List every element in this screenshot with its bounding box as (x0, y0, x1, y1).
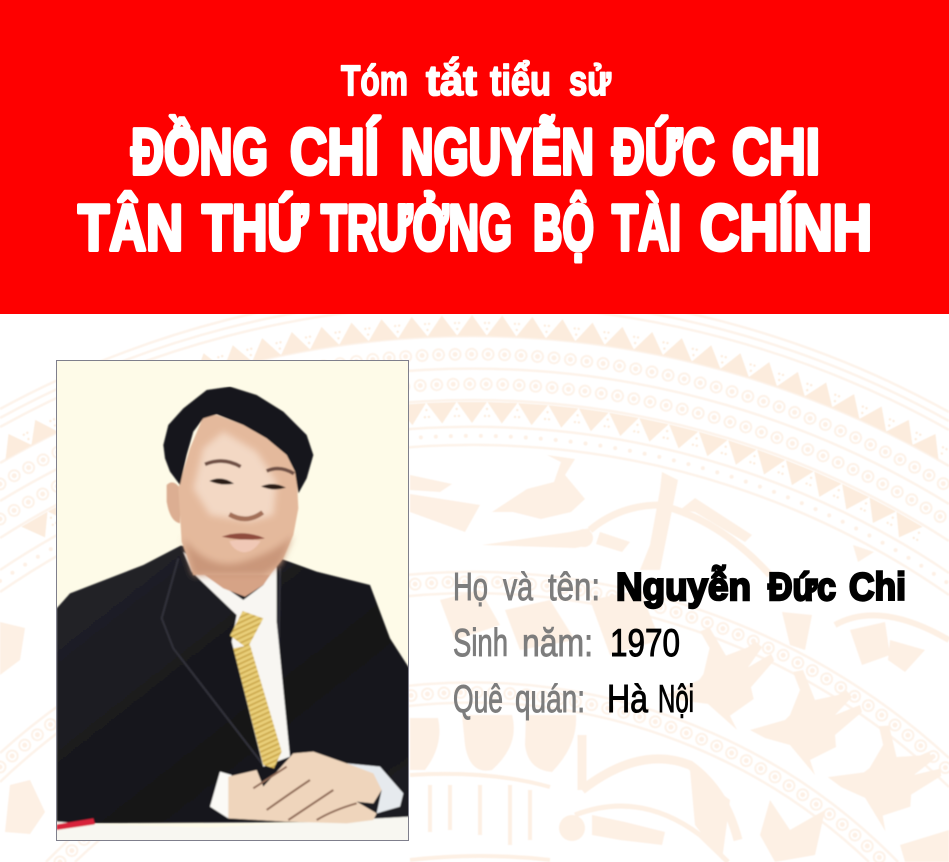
label: full name: tên: (548, 566, 600, 609)
tie (230, 611, 282, 768)
deer (750, 670, 862, 775)
title: kicker: tiểu (490, 57, 551, 105)
deer (821, 718, 947, 838)
bird (492, 455, 585, 519)
title: position line: THỨ (202, 191, 308, 264)
label: hometown: Quê (453, 678, 503, 721)
house motif (559, 735, 738, 862)
chin and neck (205, 574, 271, 598)
value: hometown: Nội (658, 678, 694, 721)
hands (210, 752, 403, 823)
outer triangle band (0, 315, 949, 461)
deer (657, 619, 784, 739)
label: full name: và (503, 566, 533, 609)
label: hometown: quán: (515, 678, 585, 721)
crane (482, 472, 770, 575)
red banner (0, 0, 949, 314)
eyes (209, 479, 286, 489)
table (57, 817, 410, 842)
hair (163, 387, 313, 493)
label: birth year: Sinh (453, 622, 508, 665)
biography details (453, 565, 906, 721)
comb fragment under text (590, 590, 660, 655)
title: name line: NGUYỄN (401, 115, 594, 188)
value: full name: Chi (849, 566, 906, 609)
title: position line: TÀI (612, 191, 681, 264)
lower figures (410, 774, 550, 860)
label: full name: Họ (453, 566, 488, 609)
title: name line: CHI (732, 115, 820, 188)
photo backdrop (56, 360, 408, 840)
shirt (183, 552, 290, 767)
rings of small circles (0, 354, 949, 862)
bird frieze, top ring (0, 455, 949, 862)
title: kicker: sử (569, 57, 612, 105)
title: position line: CHÍNH (700, 191, 872, 264)
comb fragment under text (505, 600, 575, 650)
label: birth year: năm: (522, 622, 593, 665)
lower face shadow (183, 535, 293, 575)
title: kicker: Tóm (341, 57, 408, 105)
title: name line: CHÍ (290, 115, 381, 188)
jacket lapels (162, 558, 280, 765)
wing fragment (410, 475, 452, 492)
right lower figures (760, 800, 949, 862)
title block (78, 56, 872, 264)
wing fragment (410, 494, 480, 532)
title: position line: BỘ (533, 191, 594, 264)
title: name line: ĐỒNG (131, 115, 268, 188)
nose (229, 512, 263, 519)
face (178, 415, 298, 575)
title: position line: TÂN (78, 191, 183, 264)
title: position line: TRƯỞNG (321, 191, 512, 264)
outer concentric lines (0, 289, 949, 862)
bird fragment, left edge (0, 622, 25, 675)
title: kicker: tắt (426, 56, 477, 105)
value: full name: Đức (768, 566, 836, 609)
comb fragment under text (440, 590, 500, 640)
title: name line: ĐỨC (612, 115, 715, 188)
value: hometown: Hà (607, 678, 648, 721)
eyebrows (205, 461, 294, 474)
value: full name: Nguyễn (616, 565, 751, 609)
head (163, 387, 313, 575)
deer, left edge (5, 780, 45, 834)
inner triangle band (22, 402, 925, 547)
footprints (410, 715, 576, 772)
mouth (222, 533, 265, 552)
jacket (57, 546, 409, 823)
portrait photo (56, 360, 410, 842)
red folder edge (57, 818, 95, 830)
portrait figure (57, 387, 410, 842)
background: bronze drum pattern (0, 289, 949, 862)
ear (167, 482, 180, 523)
value: birth year: 1970 (610, 622, 680, 665)
face highlight (193, 432, 277, 522)
right bird fragments (782, 545, 949, 672)
